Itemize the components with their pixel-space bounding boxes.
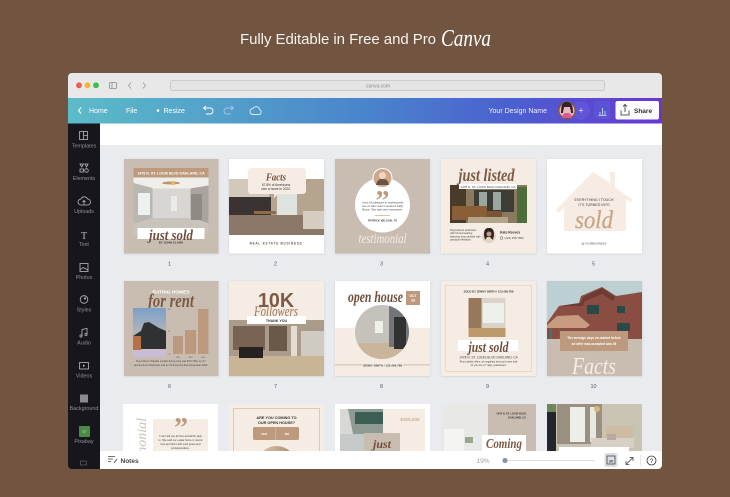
sidebar item: Styles: Styles	[77, 308, 92, 314]
thumbnail 3: testimonial: Bruce. She was very impressive.	[362, 208, 403, 212]
thumbnail 14: coming: Coming	[486, 437, 522, 452]
page numbers row 2: 9	[486, 384, 489, 390]
thumbnail 12: open house question	[229, 404, 324, 451]
zoom slider	[502, 458, 595, 463]
thumbnail 13: price just: $320,000	[400, 417, 420, 422]
sidebar item: Background: Background	[70, 406, 98, 412]
sidebar item: Text: Text	[79, 242, 89, 248]
design thumbnails grid	[123, 159, 642, 486]
page numbers row 2	[168, 384, 596, 388]
thumbnail 5: sold house: @YOURBUSINESS	[581, 242, 607, 246]
sidebar item: Uploads: Uploads	[74, 209, 94, 215]
thumbnail 1: just sold	[124, 159, 218, 254]
thumbnail 13: price just	[335, 404, 430, 451]
thumbnail 6: for rent bar chart: 0	[169, 354, 171, 356]
sidebar item: Pixabay: Pixabay	[74, 439, 94, 445]
thumbnail 3: testimonial: I love it's pleasure to working with	[362, 200, 404, 204]
thumbnail 10: facts house: an offer was accepted was 46	[572, 342, 617, 346]
Canva gradient toolbar: Resize	[164, 108, 185, 115]
page numbers row 1	[168, 262, 595, 266]
thumbnail 4: just listed: just listed	[456, 165, 515, 185]
thumbnail 11: testimonial partial: testimonial	[135, 418, 150, 480]
thumbnail 8: open house: 28	[411, 298, 415, 302]
thumbnail 9: just sold framed: 1478 N. ST. LOUIS BLVD OAKLAND, CA	[459, 356, 519, 360]
thumbnail 7: 10K followers: 10K	[258, 290, 295, 312]
thumbnail 12: open house question: NO	[285, 432, 290, 436]
page numbers row 2: 10	[590, 384, 597, 390]
thumbnail 4: just listed: (123) 456-7890	[504, 236, 524, 240]
thumbnail 4: just listed: with home boasting	[450, 231, 473, 235]
thumbnail 2: facts: 67.8% of Americans	[262, 183, 291, 187]
thumbnail 9: just sold framed: just sold	[467, 340, 509, 356]
sidebar item: Text	[79, 232, 89, 246]
title: Fully Editable in Free and Pro Canva: Canva	[441, 26, 491, 52]
thumbnail 11: testimonial partial	[123, 404, 218, 451]
thumbnail 10: facts house	[547, 281, 642, 380]
thumbnail 5: sold house: IT'S TURNED INTO	[578, 203, 610, 207]
page numbers row 1: 3	[380, 262, 383, 268]
thumbnail 8: open house: JENNY SMITH / 123.456.789	[363, 364, 402, 368]
thumbnail 12: open house question: ARE YOU COMING TO	[256, 416, 297, 420]
page numbers row 2: 7	[274, 384, 277, 390]
page numbers row 1: 1	[168, 262, 171, 268]
browser chrome bar: canva.com	[366, 84, 390, 90]
thumbnail 4: just listed: featuring long vanities with	[450, 234, 481, 238]
thumbnail 5: sold house: EVERYTHING I TOUCH	[575, 198, 614, 202]
sidebar item: Photos: Photos	[76, 275, 93, 281]
page numbers row 1: 4	[486, 262, 489, 268]
sidebar item: Templates: Templates	[72, 144, 97, 150]
thumbnail 14: coming: OAKLAND, CA	[508, 416, 526, 420]
thumbnail 10: facts house: Facts	[571, 354, 616, 380]
thumbnail 1: just sold: just sold	[147, 228, 193, 244]
thumbnail 4: just listed: Kate Reeves	[500, 230, 520, 234]
sidebar item: Elements	[73, 164, 95, 180]
thumbnail 2: facts: REAL ESTATE BUSINESS	[250, 242, 302, 246]
page numbers row 1: 5	[592, 262, 595, 268]
thumbnail 2: facts	[229, 159, 324, 254]
thumbnail 9: just sold framed: SOLD BY JENNY SMITH / 123.456.789	[464, 290, 514, 294]
thumbnail 12: open house question: YES	[261, 432, 267, 436]
thumbnail 7: 10K followers	[229, 281, 324, 376]
thumbnail 13: price just: just	[371, 437, 392, 451]
browser window	[68, 73, 662, 486]
thumbnail 9: just sold framed: Rest multiple offers, we negotiate and your house sold	[460, 360, 518, 364]
fullscreen icon	[626, 458, 633, 464]
sidebar item: Background	[70, 394, 98, 412]
thumbnail 3: testimonial: ”	[376, 186, 390, 217]
thumbnail 6: for rent bar chart: 2022	[188, 357, 194, 359]
sidebar item: Pixabay	[74, 426, 94, 445]
thumbnail 6: for rent bar chart: 2023	[201, 357, 206, 359]
thumbnail 4: just listed: practical elevation.	[450, 238, 472, 242]
thumbnail 7: 10K followers: THANK YOU	[266, 319, 288, 323]
thumbnail 6: for rent bar chart: 15	[168, 331, 171, 333]
Canva gradient toolbar: Share	[634, 108, 652, 115]
zoom percentage: 19%	[476, 458, 490, 465]
thumbnail 6: for rent bar chart: percent from November and up 10.8 percent from December 2022.	[134, 364, 208, 367]
thumbnail 5: sold house	[547, 159, 642, 254]
thumbnail 6: for rent bar chart: December's Oakville median home price was $717,000, up 3.7	[136, 360, 206, 363]
thumbnail 9: just sold framed: for you are in 7 days, guaranteed.	[471, 364, 507, 367]
thumbnail 1: just sold: BY JOHN CLARK	[159, 240, 184, 244]
thumbnail 11: testimonial partial: ”	[174, 413, 188, 444]
thumbnail 2: facts: own a home in 2020.	[261, 187, 291, 191]
thumbnail 6: for rent bar chart: 30	[168, 309, 171, 311]
sidebar item: Audio	[77, 328, 91, 346]
page numbers row 1: 2	[274, 262, 277, 268]
thumbnail 2: facts: Facts	[265, 172, 286, 184]
thumbnail 8: open house: open house	[348, 289, 403, 306]
thumbnail 11: testimonial partial: is. She sold our estate home in record	[159, 438, 203, 442]
thumbnail 6: for rent bar chart: 2021	[176, 357, 181, 359]
thumbnail 3: testimonial	[335, 159, 430, 254]
thumbnail 9: just sold framed	[441, 281, 536, 376]
thumbnail 15: bedroom	[547, 404, 642, 451]
page numbers row 2: 8	[380, 384, 383, 390]
thumbnail 11: testimonial partial: I can't tell you all how wonderful Jack	[159, 434, 202, 438]
sidebar item: Text: T	[81, 231, 87, 242]
sidebar item: Pixabay: 87	[83, 430, 86, 434]
Canva gradient toolbar: Your Design Name	[488, 108, 547, 115]
sidebar item: Photos	[76, 263, 92, 279]
sidebar item: Elements: Elements	[73, 176, 96, 182]
sidebar item: Uploads	[74, 197, 94, 215]
sidebar item: Videos: Videos	[76, 374, 92, 380]
thumbnail 15: bedroom: · · ·	[592, 449, 597, 453]
thumbnail 6: for rent bar chart: for rent	[148, 291, 195, 312]
thumbnail 6: for rent bar chart	[124, 281, 218, 376]
thumbnail 14: coming: 1478 N. ST. LOUIS BLVD	[496, 412, 526, 416]
page view button: 30	[609, 458, 614, 463]
Canva gradient toolbar: File	[126, 108, 137, 115]
notes icon and label	[108, 456, 138, 464]
thumbnail 12: open house question: OUR OPEN HOUSE?	[258, 421, 296, 425]
thumbnail 4: just listed	[441, 159, 536, 254]
thumbnail 8: open house	[335, 281, 430, 376]
thumbnail 1: just sold: 1478 N. ST. LOUIS BLVD OAKLAND, CA	[137, 172, 205, 176]
browser chrome bar	[76, 80, 605, 91]
thumbnail 3: testimonial: testimonial	[358, 232, 407, 247]
thumbnail 7: 10K followers: Followers	[253, 304, 298, 320]
title: Fully Editable in Free and Pro Canva	[240, 26, 491, 52]
thumbnail 11: testimonial partial: time and did it with such grace and	[161, 442, 201, 446]
sidebar item: Audio: Audio	[77, 340, 91, 346]
Canva gradient toolbar: Home	[89, 108, 108, 115]
thumbnail 4: just listed: Dog Hotel is perfection	[450, 228, 477, 232]
thumbnail 11: testimonial partial: professionalism.	[171, 446, 190, 450]
title: Fully Editable in Free and Pro Canva: Fully Editable in Free and Pro	[240, 31, 436, 48]
Canva gradient toolbar: +	[578, 106, 584, 116]
page view button	[604, 453, 618, 467]
sidebar item: Videos	[76, 362, 92, 380]
bar 2022	[185, 330, 196, 354]
thumbnail 6: for rent bar chart: RATING HOMES	[153, 290, 190, 296]
thumbnail 4: just listed: 1478 N. ST. LOUIS BLVD OAKLAND, CA	[461, 185, 515, 189]
thumbnail 5: sold house: sold	[575, 207, 613, 234]
sidebar item: more	[80, 461, 86, 465]
thumbnail 3: testimonial: one of Jane team members Sally	[362, 204, 404, 208]
bar 2021	[173, 336, 183, 354]
white options bar	[100, 124, 662, 145]
thumbnail 14: coming	[441, 404, 536, 451]
bar 2023	[198, 309, 208, 354]
bottom notes bar	[100, 451, 662, 470]
left sidebar	[68, 124, 100, 470]
Canva gradient toolbar	[68, 98, 662, 124]
page numbers row 2: 6	[168, 384, 171, 390]
help icon	[647, 456, 656, 465]
help icon: ?	[650, 458, 654, 465]
thumbnail 10: facts house: The average days on market before	[567, 336, 621, 340]
sidebar item: Templates	[72, 132, 97, 150]
thumbnail 3: testimonial: PATRICK WILSON, TX	[368, 218, 397, 222]
sidebar item: Styles	[77, 296, 92, 314]
thumbnail 8: open house: OCT	[409, 294, 418, 298]
notes icon and label: Notes	[120, 458, 139, 465]
